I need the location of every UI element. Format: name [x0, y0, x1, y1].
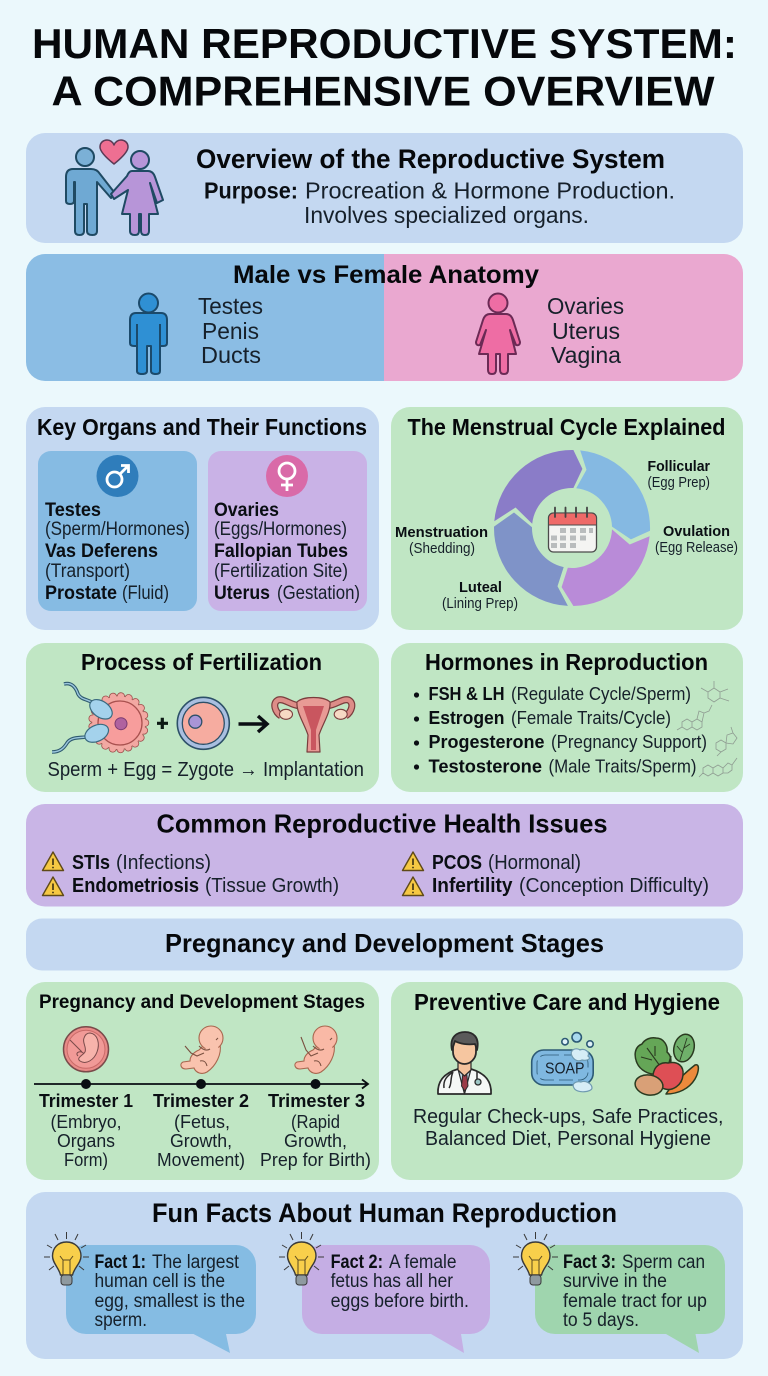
callout: fact 3 [513, 1232, 725, 1353]
icon: light bulb [44, 1232, 89, 1285]
icon: couple holding hands [66, 140, 163, 235]
text: male organs: Ducts [201, 342, 261, 368]
text: trimester 2: Trimester 2 [153, 1090, 249, 1111]
text: soap label: SOAP [545, 1060, 584, 1078]
text: female organs: Uterus [552, 318, 620, 344]
text: fact 1: Fact 1: [94, 1252, 146, 1273]
text: preventive care list: Balanced Diet, Personal Hygiene [425, 1127, 711, 1150]
icon: embryo [64, 1027, 108, 1072]
icon: hormone molecules [677, 681, 737, 777]
icon: light bulb [279, 1232, 324, 1285]
text: fact 3: Sperm can [622, 1252, 705, 1273]
text: male organ list: (Sperm/Hormones) [45, 519, 190, 540]
text: preventive care list [413, 1105, 724, 1150]
list: testosterone: (Male Traits/Sperm) [548, 756, 696, 776]
item: STIs [42, 851, 211, 874]
text: trimester 1 [39, 1090, 133, 1170]
icon: plus [157, 718, 168, 729]
list: progesterone [414, 731, 707, 752]
list: FSH and LH [414, 683, 691, 704]
heading: fertilization: Process of Fertilization [81, 649, 322, 675]
item: STIs: (Infections) [116, 851, 211, 874]
panel: common health issues [26, 804, 743, 906]
list: estrogen [414, 707, 671, 728]
item: infertility: Infertility [432, 874, 513, 897]
label: luteal: (Lining Prep) [442, 595, 518, 612]
text: fact 1 [94, 1252, 245, 1331]
title: A COMPREHENSIVE OVERVIEW [52, 68, 715, 114]
text: fact 2: fetus has all her [331, 1271, 454, 1292]
text: trimester 2: Movement) [157, 1149, 245, 1170]
text: trimester 2: (Fetus, [174, 1111, 230, 1132]
heading: hormones: Hormones in Reproduction [425, 649, 708, 675]
label: follicular: (Egg Prep) [648, 474, 710, 491]
text: female organ list: (Fertilization Site) [214, 561, 348, 582]
heading: pregnancy bar: Pregnancy and Development Stages [165, 928, 604, 958]
list: progesterone: (Pregnancy Support) [551, 731, 707, 752]
panel: hormones [391, 643, 743, 792]
heading: preventive care: Preventive Care and Hygiene [414, 989, 720, 1015]
text: trimester 2: Growth, [170, 1130, 232, 1151]
text: trimester 3: Growth, [284, 1130, 347, 1151]
sub-panel: male organs [38, 451, 197, 611]
text: fact 2: eggs before birth. [331, 1291, 469, 1312]
label: ovulation: (Egg Release) [655, 539, 738, 556]
text: female organ list [214, 500, 360, 604]
icon: calendar [548, 508, 596, 552]
text: male organ list: (Transport) [45, 561, 130, 582]
heading: fun facts: Fun Facts About Human Reproduction [152, 1198, 617, 1228]
panel: preventive care [391, 982, 743, 1180]
icon: soap [532, 1033, 593, 1092]
text: purpose [204, 178, 675, 228]
icon: sperm meeting egg [52, 684, 145, 752]
title: HUMAN REPRODUCTIVE SYSTEM: [32, 20, 737, 67]
heading: overview: Overview of the Reproductive System [196, 144, 665, 174]
text: fact 3: female tract for up [563, 1291, 707, 1312]
text: fact 3: survive in the [563, 1271, 667, 1292]
text: male organs: Testes [198, 293, 263, 319]
icon: fetus second trimester [181, 1026, 223, 1073]
text: purpose: Procreation & Hormone Production. [305, 178, 675, 204]
callout: fact 2 [279, 1232, 490, 1353]
text: trimester 3: Prep for Birth) [260, 1149, 371, 1170]
heading: pregnancy stages: Pregnancy and Development Stages [39, 991, 365, 1013]
item: endometriosis: Endometriosis [72, 874, 199, 897]
label: ovulation [655, 523, 738, 556]
icon: fetus third trimester [295, 1026, 337, 1073]
text: fact 1: human cell is the [94, 1271, 225, 1292]
item: PCOS: (Hormonal) [488, 851, 581, 874]
text: female organs [547, 293, 624, 368]
heading: key organs: Key Organs and Their Functions [37, 414, 367, 440]
text: trimester 3: (Rapid [291, 1111, 340, 1132]
text: female organs: Ovaries [547, 293, 624, 319]
list: progesterone: Progesterone [428, 731, 544, 752]
label: luteal [442, 579, 518, 612]
text: trimester 1: Trimester 1 [39, 1090, 133, 1111]
title [32, 20, 737, 114]
item: STIs: STIs [72, 851, 110, 874]
heading: male vs female: Male vs Female Anatomy [233, 261, 539, 289]
panel: fertilization [26, 643, 379, 792]
icon: light bulb [513, 1232, 558, 1285]
icon: male figure [130, 294, 167, 374]
text: trimester 1: Form) [64, 1149, 108, 1170]
text: fact 2: A female [389, 1252, 456, 1273]
text: fact 2: Fact 2: [331, 1252, 383, 1273]
text: fact 1: sperm. [94, 1310, 147, 1331]
list: FSH and LH: FSH & LH [428, 683, 504, 704]
text: preventive care list: Regular Check-ups, Safe Practices, [413, 1105, 724, 1128]
text: fact 1: egg, smallest is the [94, 1291, 245, 1312]
panel: pregnancy heading bar [26, 918, 743, 970]
text: fact 3: Fact 3: [563, 1252, 616, 1273]
label: luteal: Luteal [459, 579, 502, 596]
text: female organ list: (Eggs/Hormones) [214, 519, 347, 540]
callout: fact 1 [44, 1232, 256, 1353]
list: testosterone [414, 756, 696, 776]
chart: cycle ring [494, 450, 650, 606]
text: fact 3: to 5 days. [563, 1310, 639, 1331]
timeline arrow [34, 1079, 368, 1089]
label: follicular [648, 458, 710, 491]
panel: pregnancy stages [26, 982, 379, 1180]
list: estrogen: Estrogen [428, 707, 504, 728]
item: PCOS [402, 851, 581, 874]
icon: female figure [476, 294, 520, 374]
text: female organ list: (Gestation) [277, 583, 360, 604]
icon: uterus [275, 698, 352, 752]
text: male organs: Penis [202, 318, 259, 344]
text: male organ list [45, 500, 190, 604]
item: endometriosis [42, 874, 339, 897]
text: female organs: Vagina [551, 342, 622, 368]
text: purpose: Purpose: [204, 178, 298, 204]
icon: egg cell [177, 697, 229, 749]
text: trimester 2 [153, 1090, 249, 1170]
sub-panel: female organs [208, 451, 367, 611]
text: female organ list: Uterus [214, 583, 270, 604]
item: endometriosis: (Tissue Growth) [205, 874, 339, 897]
panel: male vs female anatomy [26, 254, 743, 381]
arrow [238, 716, 267, 732]
item: PCOS: PCOS [432, 851, 482, 874]
panel: menstrual cycle [391, 407, 743, 630]
panel: fun facts [26, 1192, 743, 1359]
item: infertility [402, 874, 709, 897]
icon: male symbol [96, 455, 138, 497]
text: trimester 1: Organs [57, 1130, 115, 1151]
list: testosterone: Testosterone [428, 756, 542, 776]
text: purpose: Involves specialized organs. [304, 202, 589, 228]
text: fact 3 [563, 1252, 707, 1331]
panel: key organs [26, 407, 379, 630]
heading: menstrual cycle: The Menstrual Cycle Explained [408, 414, 726, 440]
icon: healthy food [633, 1032, 698, 1097]
panel: overview [26, 133, 743, 243]
label: menstruation: Menstruation [395, 524, 488, 541]
icon: doctor [438, 1032, 491, 1094]
item: infertility: (Conception Difficulty) [519, 874, 709, 897]
label: follicular: Follicular [648, 458, 710, 475]
label: ovulation: Ovulation [663, 523, 730, 540]
text: male organs [198, 293, 263, 368]
text: trimester 3: Trimester 3 [268, 1090, 365, 1111]
text: male organ list: Prostate [45, 583, 117, 604]
list: FSH and LH: (Regulate Cycle/Sperm) [511, 683, 691, 704]
list: estrogen: (Female Traits/Cycle) [511, 707, 671, 728]
icon: female symbol [266, 455, 308, 497]
text: female organ list: Fallopian Tubes [214, 541, 348, 562]
text: male organ list: (Fluid) [122, 583, 169, 604]
text: fact 2 [331, 1252, 469, 1312]
label: menstruation [395, 524, 488, 557]
heading: health issues: Common Reproductive Health Issues [156, 809, 608, 839]
text: trimester 3 [260, 1090, 371, 1170]
text: male organ list: Vas Deferens [45, 541, 158, 562]
text: male organ list: Testes [45, 500, 101, 521]
text: fertilization equation: Sperm + Egg = Zygote → Implantation [48, 758, 364, 781]
text: trimester 1: (Embryo, [50, 1111, 122, 1132]
text: female organ list: Ovaries [214, 500, 279, 521]
label: menstruation: (Shedding) [409, 540, 475, 557]
text: fact 1: The largest [152, 1252, 240, 1273]
